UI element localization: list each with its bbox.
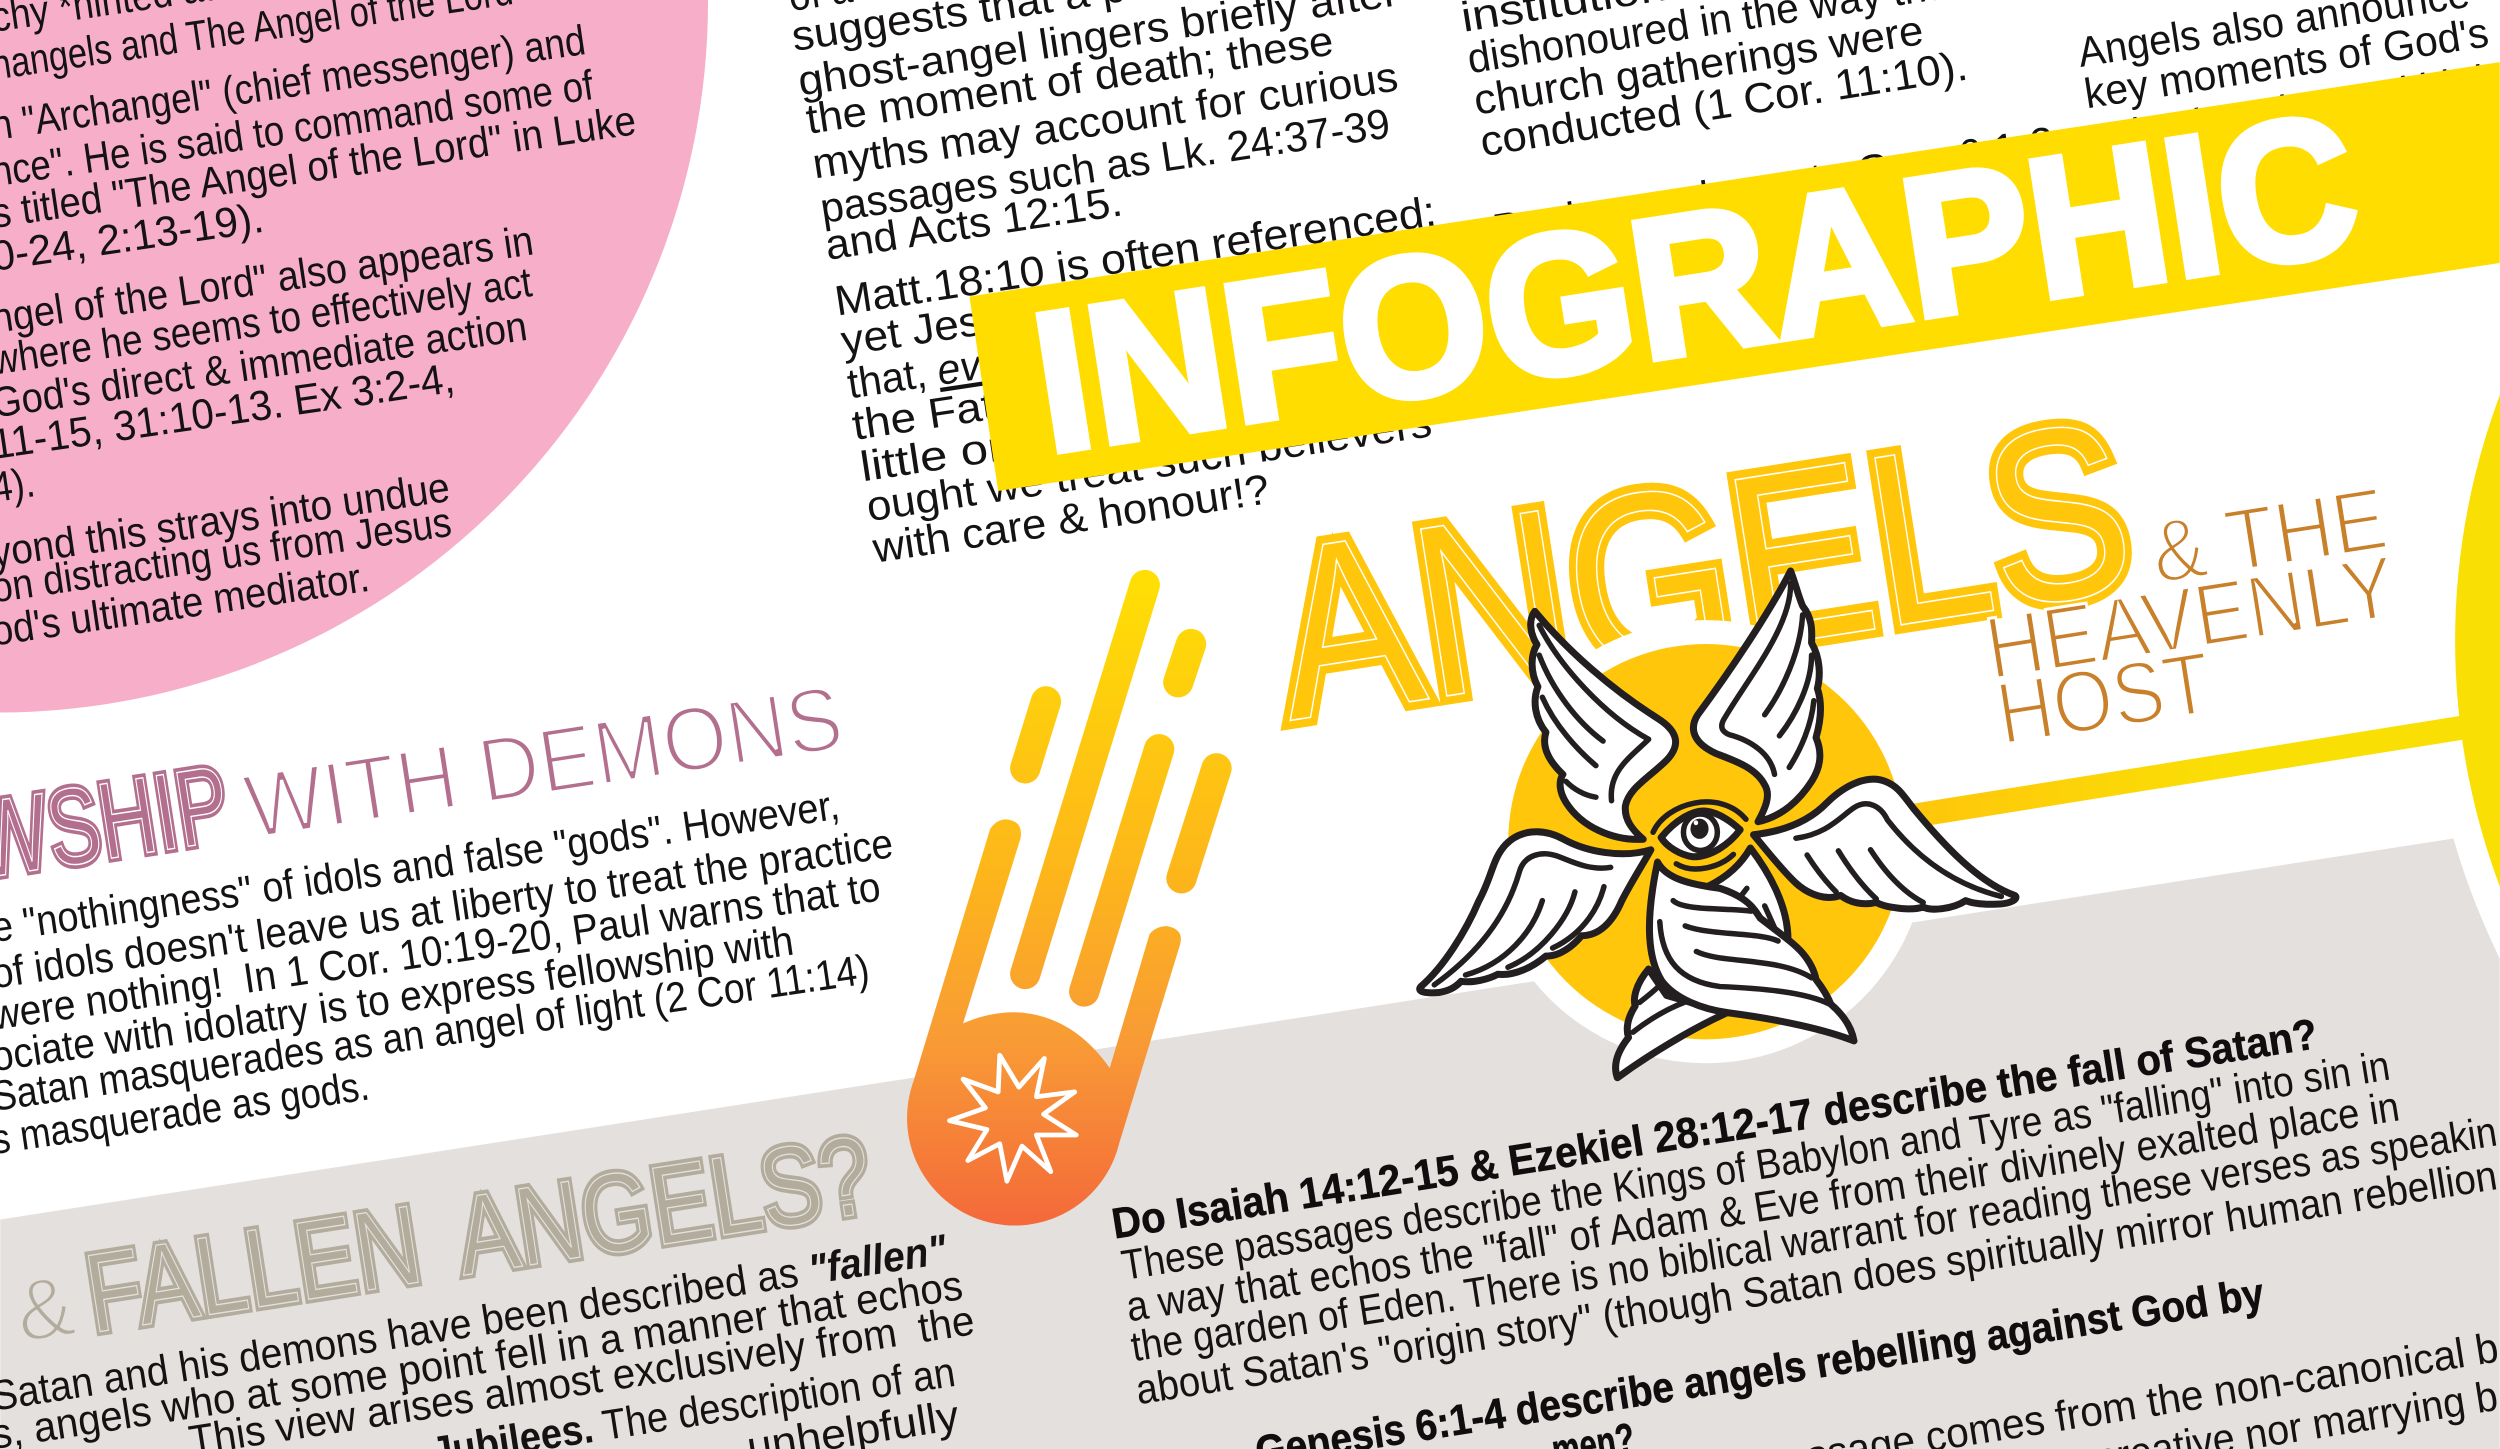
text block: guardian angels column: Matt.18:10 is often referenced: [831, 187, 1439, 325]
text block: angel hierarchy in pink circle: ngel of the Lord" also appears in [0, 217, 536, 342]
icon: central eye [1653, 802, 1746, 869]
text block: guardian angels column: yet Jesus warns us here [838, 246, 1318, 364]
text block: fellowship with demons paragraph: s masquerade as gods. [0, 1062, 372, 1163]
text block: angels in church gatherings column: conducted (1 Cor. 11:10). [1477, 42, 1971, 165]
text block: angels announce column [2075, 0, 2500, 164]
text block: fellowship with demons paragraph: ociate with idolatry is to express fellowship with [0, 917, 796, 1080]
text block: angel hierarchy in pink circle: nce". He is said to command some of [0, 61, 596, 195]
text block: fallen angels paragraph: Satan and his demons have been described as "fallen" [0, 1225, 951, 1420]
heading: fellowship with demons [0, 667, 849, 901]
text block: guardian angels column: the moment of death; these [803, 17, 1336, 143]
panel: pink circle [0, 0, 708, 713]
heading: & fallen angels?: FALLEN ANGELS? [77, 1112, 879, 1356]
icon: falling comet with star [907, 585, 1217, 1226]
wing: top left [1531, 611, 1676, 839]
text block: fellowship with demons paragraph: Satan masquerades as an angel of light (2 Cor 11:14) [0, 946, 872, 1120]
text block: angel hierarchy in pink circle: God's direct & immediate action [0, 302, 530, 427]
text block: fellowship with demons paragraph: were nothing! In 1 Cor. 10:19-20, Paul warns that to [0, 863, 883, 1039]
text block: guardian angels column: ought we treat such believers [863, 398, 1435, 530]
text block: guardian angels column: that, even their angels see [844, 289, 1324, 407]
text block: guardian angels column [785, 0, 1439, 572]
wing: lower front [1649, 862, 1854, 1041]
text block: angel hierarchy in pink circle [0, 0, 639, 654]
wing: left [1420, 832, 1651, 993]
text block: guardian angels column: passages such as Lk. 24:37-39 [817, 100, 1393, 232]
connector line from emblem to yellow circle [1881, 724, 2487, 821]
banner: INFOGRAPHIC: INFOGRAPHIC [1020, 72, 2371, 495]
title: ANGELS: ANGELS [1256, 369, 2148, 773]
text block: angels in church gatherings column: church gatherings were [1470, 6, 1926, 124]
text block: angels in church gatherings column: Paul may also note Gen. 6:1-2 [1490, 118, 2057, 253]
text block: Isaiah and Ezekiel question: a way that echos the "fall" of Adam & Eve from their divinely exalted place in [1123, 1082, 2402, 1330]
text block: fellowship with demons paragraph [0, 781, 896, 1163]
text block: Isaiah and Ezekiel question: Do Isaiah 14:12-15 & Ezekiel 28:12-17 describe the fall of Satan? [1109, 1010, 2321, 1248]
heading: & fallen angels? [9, 1112, 879, 1361]
wing: back lower left [1616, 969, 1727, 1078]
wing: back fold [1709, 848, 1788, 943]
panel: yellow circle at right edge [2426, 0, 2500, 1366]
text block: guardian angels column: little ones matter; how [857, 372, 1337, 490]
heading: & fallen angels?: & [9, 1257, 81, 1361]
icon: six winged seraph with eye [1420, 571, 2016, 1078]
text block: guardian angels column: with care & honour!? [869, 465, 1272, 572]
text block: angel hierarchy in pink circle: 11-15, 31:10-13. Ex 3:2-4, [0, 354, 457, 468]
subtitle: & the heavenly host: & THE [2145, 469, 2393, 602]
subtitle: & the heavenly host: HEAVENLY [1979, 537, 2402, 698]
text block: guardian angels column: the Father's face; these [849, 331, 1329, 449]
text block: angel hierarchy in pink circle: n "Archangel" (chief messenger) and [0, 16, 588, 149]
text block: angels announce column: key moments of God's [2081, 8, 2492, 117]
text block: guardian angels column: myths may account for curious [809, 53, 1401, 187]
text block: angel hierarchy in pink circle: on distracting us from Jesus [0, 498, 454, 611]
text block: angel hierarchy in pink circle: s titled "The Angel of the Lord" in Luke [0, 96, 639, 237]
text block: angel hierarchy in pink circle: yond this strays into undue [0, 463, 453, 576]
subtitle: & the heavenly host: HOST [1990, 633, 2218, 763]
heading: & fallen angels?: FALLEN ANGELS? [77, 1112, 879, 1356]
text block: angels in church gatherings column [1458, 0, 2057, 253]
text block: angel hierarchy in pink circle: where he seems to effectively act [0, 258, 535, 384]
subtitle: & the heavenly host [1979, 469, 2402, 763]
title: ANGELS: ANGELS [1256, 369, 2148, 773]
panel: grey fallen angels band [0, 838, 2500, 1449]
text block: guardian angels column: and Acts 12:15. [822, 177, 1125, 269]
wing: right [1754, 779, 2016, 909]
emblem background: gold disc with white ring [1484, 620, 1927, 1063]
heading: fellowship with demons: WITH DEMONS [238, 667, 849, 858]
text block: fellowship with demons paragraph: e "nothingness" of idols and false "gods". However, [0, 781, 842, 951]
wing: top right [1693, 571, 1821, 822]
text block: fellowship with demons paragraph: of idols doesn't leave us at liberty to treat the practice [0, 819, 896, 997]
text block: angel hierarchy in pink circle: od's ultimate mediator. [0, 553, 372, 654]
